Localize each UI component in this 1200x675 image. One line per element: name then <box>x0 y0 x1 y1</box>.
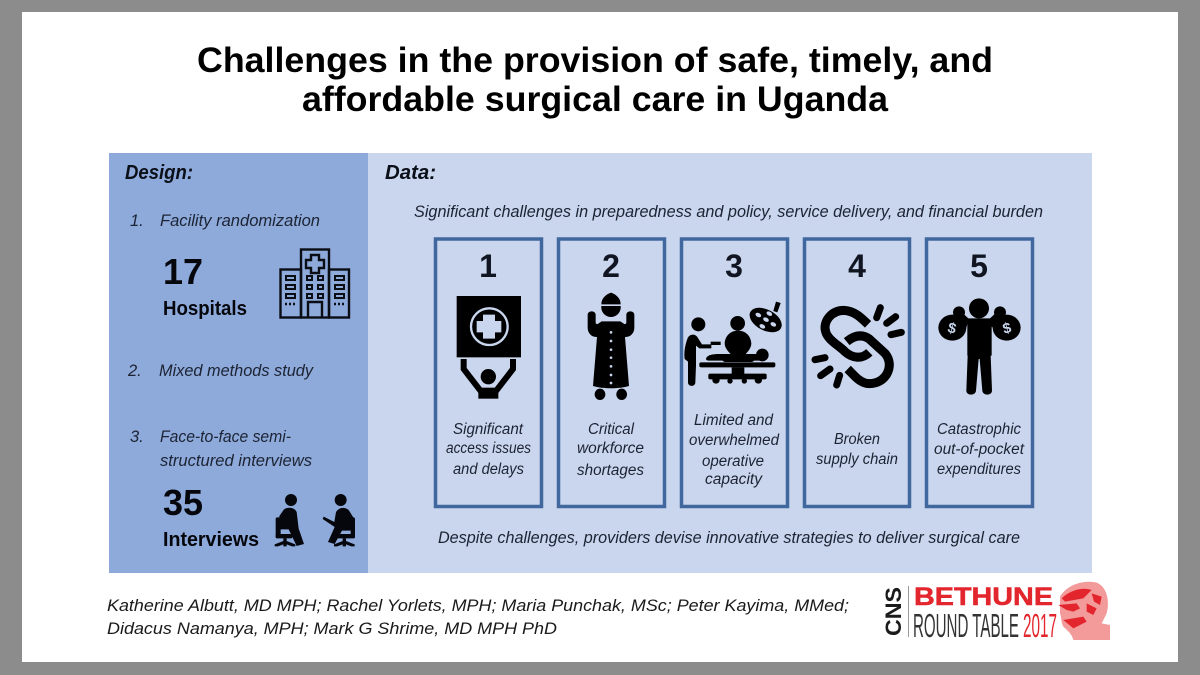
card 3: operative capacity: overwhelmed <box>689 432 780 449</box>
stat: 17 hospitals: Hospitals <box>163 298 247 320</box>
logo: CNS Bethune Round Table 2017: 2017 <box>1023 607 1057 644</box>
card 1: access issues: 1 <box>479 248 497 284</box>
card 1: access issues: Significant <box>453 421 524 438</box>
logo: CNS Bethune Round Table 2017: ROUND TABLE <box>913 607 1019 644</box>
stat: 35 interviews: 35 <box>163 482 203 523</box>
icon: person holding medical sign <box>457 296 521 399</box>
authors: Didacus Namanya, MPH; Mark G Shrime, MD MPH PhD <box>107 620 557 638</box>
card 2: workforce shortages <box>558 239 664 506</box>
card 1: access issues <box>436 239 542 506</box>
authors: Katherine Albutt, MD MPH; Rachel Yorlets, MPH; Maria Punchak, MSc; Peter Kayima, MMed; <box>107 597 849 615</box>
card 2: workforce shortages: workforce <box>577 440 644 457</box>
stat: 35 interviews <box>163 482 259 551</box>
card 5: out-of-pocket expenditures <box>926 239 1032 506</box>
card 2: workforce shortages: shortages <box>577 462 644 479</box>
list item 2: mixed methods: 2. <box>127 362 142 380</box>
heading: design: Design: <box>125 162 193 184</box>
title <box>197 41 993 119</box>
logo: CNS Bethune Round Table 2017 <box>881 582 1110 644</box>
card 5: out-of-pocket expenditures: out-of-pocket <box>934 441 1025 458</box>
list item 2: mixed methods: Mixed methods study <box>159 362 315 380</box>
card 5: out-of-pocket expenditures: Catastrophic <box>937 421 1021 438</box>
list item 3: interviews: Face-to-face semi- <box>160 428 291 446</box>
card 4: broken supply chain <box>804 239 910 506</box>
list item 3: interviews <box>130 428 312 470</box>
data conclusion text: Despite challenges, providers devise innovative strategies to deliver surgical care <box>438 529 1020 547</box>
card 4: broken supply chain: Broken <box>834 431 880 448</box>
card 3: operative capacity: operative <box>702 453 764 470</box>
card 2: workforce shortages: Critical <box>588 421 635 438</box>
title: affordable surgical care in Uganda <box>302 80 889 119</box>
icon: operating theatre team <box>684 302 786 386</box>
card 5: out-of-pocket expenditures: expenditures <box>937 461 1021 478</box>
card 3: operative capacity <box>682 239 788 506</box>
logo: CNS Bethune Round Table 2017: CNS <box>881 587 906 636</box>
list item 1: facility randomization: 1. <box>130 212 144 230</box>
card 1: access issues: access issues <box>446 440 531 457</box>
logo portrait <box>1058 582 1110 640</box>
stat: 35 interviews: Interviews <box>163 529 259 551</box>
card 4: broken supply chain: supply chain <box>816 451 898 468</box>
list item 1: facility randomization: Facility randomization <box>160 212 320 230</box>
icon: hospital building <box>280 250 349 318</box>
card 2: workforce shortages: 2 <box>602 248 620 284</box>
data summary text: Significant challenges in preparedness and policy, service delivery, and financial burden <box>414 203 1043 221</box>
panel: design <box>109 153 368 573</box>
card 3: operative capacity: 3 <box>725 248 743 284</box>
authors <box>107 597 849 638</box>
list item 3: interviews: structured interviews <box>160 452 312 470</box>
stat: 17 hospitals: 17 <box>163 251 203 292</box>
icon: surgeon in gown <box>588 293 634 400</box>
card 4: broken supply chain: 4 <box>848 248 866 284</box>
icon: person holding money bags <box>938 298 1021 395</box>
icon: broken chain link <box>815 308 901 385</box>
panel: data <box>368 153 1092 573</box>
stat: 17 hospitals <box>163 251 247 320</box>
card 5: out-of-pocket expenditures: 5 <box>970 248 988 284</box>
icon: person holding money bags: $ <box>1001 320 1013 338</box>
list item 3: interviews: 3. <box>130 428 144 446</box>
card 1: access issues: and delays <box>453 461 524 478</box>
icon: person holding money bags: $ <box>946 320 958 338</box>
icon: two people in chairs <box>275 494 355 546</box>
title: Challenges in the provision of safe, timely, and <box>197 41 993 80</box>
card 3: operative capacity: Limited and <box>694 412 774 429</box>
card 3: operative capacity: capacity <box>705 471 763 488</box>
logo: CNS Bethune Round Table 2017: BETHUNE <box>914 583 1053 611</box>
heading: data: Data: <box>385 162 436 184</box>
